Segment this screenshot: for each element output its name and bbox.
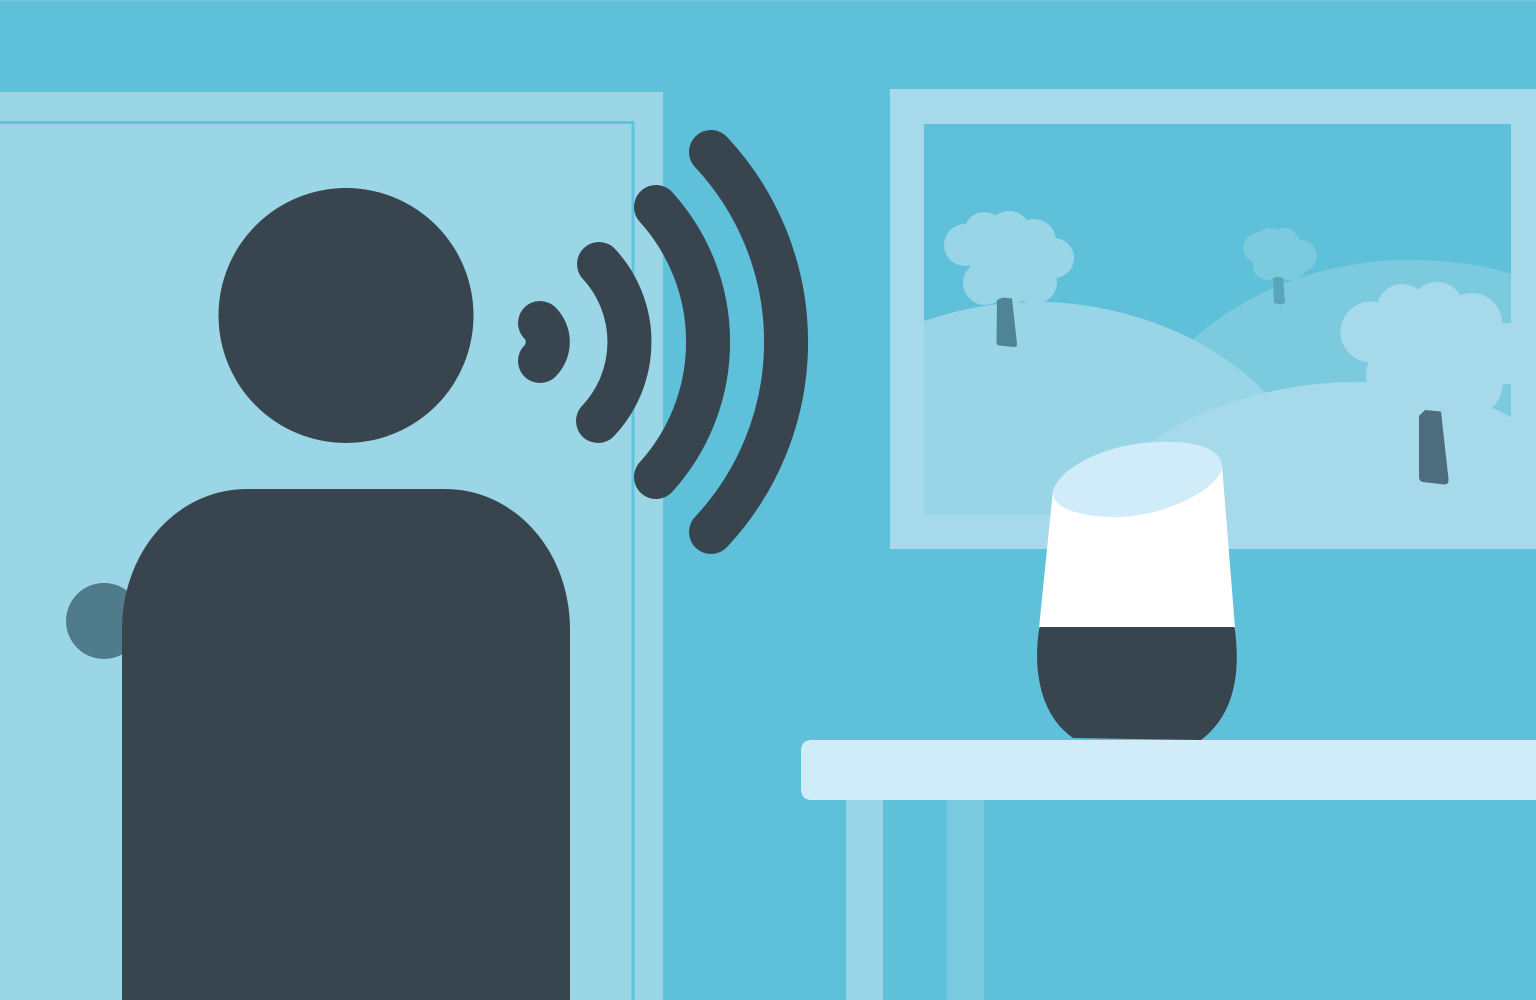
picture frame bbox=[890, 89, 1536, 549]
back leg bbox=[947, 800, 984, 1000]
smart speaker bbox=[1037, 442, 1237, 740]
back hill bbox=[1190, 260, 1511, 440]
speaker base bbox=[1037, 627, 1237, 740]
person bbox=[122, 188, 570, 1000]
wave 2 bbox=[598, 264, 629, 421]
left tree bbox=[944, 211, 1074, 347]
middle hill bbox=[924, 302, 1272, 515]
wave 1 bbox=[540, 323, 548, 361]
body bbox=[122, 489, 570, 1000]
large tree bbox=[1340, 282, 1511, 485]
speaker top bbox=[1053, 442, 1222, 517]
speaker white body bbox=[1039, 465, 1235, 628]
door knob bbox=[66, 583, 142, 659]
table bbox=[801, 740, 1536, 1000]
front hill bbox=[1148, 382, 1536, 549]
wave 4 bbox=[711, 152, 786, 532]
door bbox=[0, 92, 663, 1000]
front leg bbox=[846, 800, 883, 1000]
table top bbox=[801, 740, 1536, 800]
wave 3 bbox=[656, 207, 708, 477]
sound waves bbox=[540, 152, 786, 532]
small tree bbox=[1244, 228, 1316, 304]
head bbox=[218, 188, 474, 443]
